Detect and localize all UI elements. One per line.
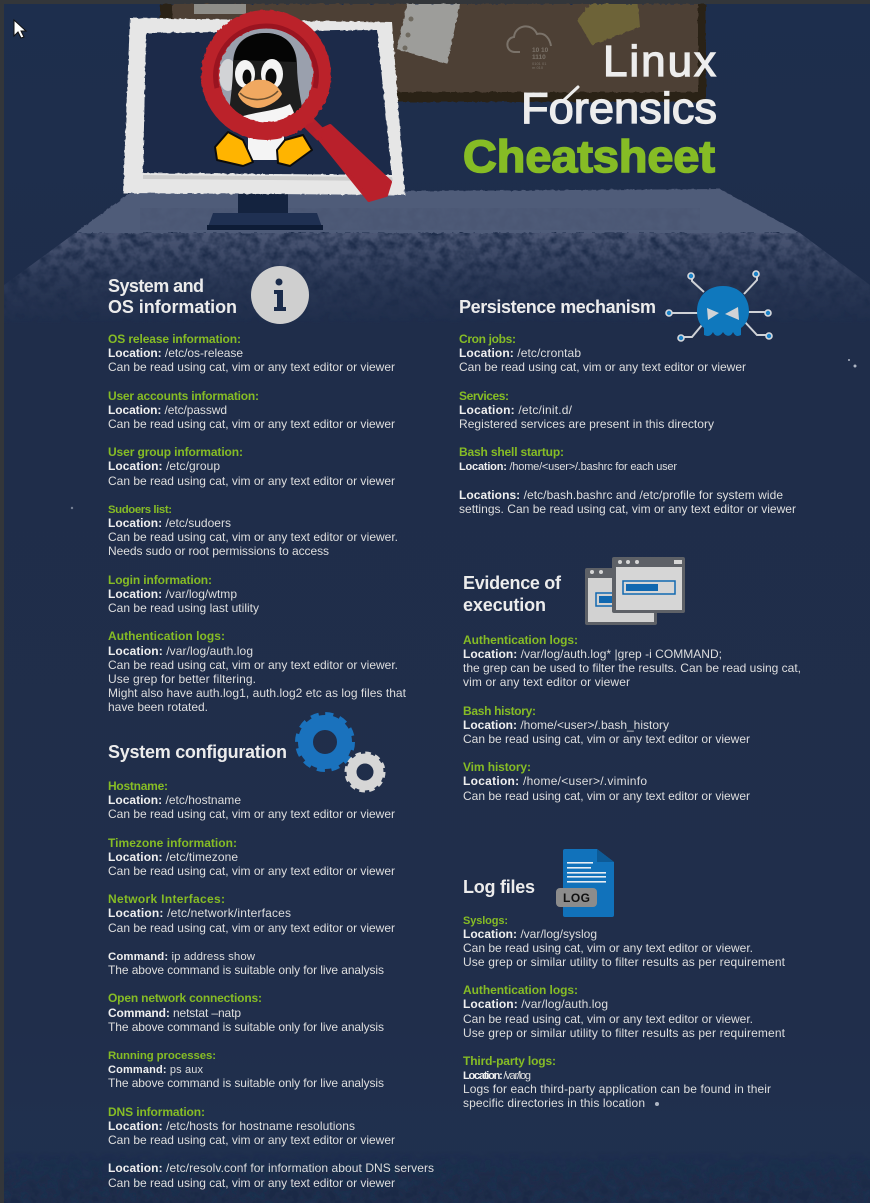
heading: system and OS information: OS information [108, 297, 237, 317]
title: Linux [603, 37, 716, 86]
cloud doodle: 0101 01 [532, 61, 547, 66]
entry: DNS information [108, 1105, 434, 1190]
entry: authentication logs: Use grep for better filtering. [108, 672, 256, 686]
entry: syslogs: Use grep or similar utility to filter results as per requirement [463, 955, 786, 969]
entry: sudoers: Can be read using cat, vim or any text editor or viewer. [108, 530, 398, 544]
entry: syslogs [463, 915, 786, 969]
panel: log files [463, 849, 786, 1110]
icon: info [251, 266, 309, 324]
entry: authentication logs [108, 629, 407, 714]
entry: hostname: Hostname: [108, 779, 168, 793]
entry: running processes: Running processes: [108, 1050, 216, 1062]
entry: network interfaces: Command: ip address show [108, 951, 256, 963]
entry: open network connections: Command: netstat –natp [108, 1006, 241, 1020]
cloud doodle: m 010 [532, 65, 544, 70]
entry: DNS information: Location: /etc/resolv.conf for information about DNS servers [108, 1161, 434, 1175]
title [463, 37, 717, 182]
entry: login: Can be read using last utility [108, 601, 259, 615]
panel: evidence of execution [463, 557, 801, 803]
magnifier handle [306, 120, 390, 200]
cloud doodle [507, 26, 551, 70]
entry: open network connections [108, 991, 384, 1034]
entry: third-party logs: Location: /var/log [463, 1070, 531, 1082]
paint specks [71, 359, 857, 1106]
entry: login [108, 573, 259, 615]
penguin eyes [235, 60, 255, 88]
entry: running processes: The above command is suitable only for live analysis [108, 1076, 384, 1090]
monitor stand [207, 190, 323, 230]
entry: network interfaces: Location: /etc/network/interfaces [108, 906, 291, 920]
pinned sticky note [577, 4, 640, 45]
entry: login: Location: /var/log/wtmp [108, 587, 237, 601]
entry: bash shell startup: settings. Can be read using cat, vim or any text editor or viewer [459, 502, 796, 516]
entry: cron jobs: Can be read using cat, vim or any text editor or viewer [459, 360, 746, 374]
entry: syslogs: Can be read using cat, vim or any text editor or viewer. [463, 941, 753, 955]
entry: authentication logs: Authentication logs: [463, 633, 578, 647]
entry: authentication logs: the grep can be used to filter the results. Can be read using cat, [463, 661, 801, 675]
icon: skull with circuit wires [666, 271, 772, 341]
entry: vim history: Location: /home/<user>/.viminfo [463, 774, 647, 788]
entry: DNS information: Can be read using cat, vim or any text editor or viewer [108, 1133, 395, 1147]
entry: running processes [108, 1050, 384, 1090]
entry: bash shell startup [459, 445, 796, 516]
heading: system configuration: System configuration [108, 742, 287, 762]
penguin feet [215, 130, 312, 166]
entry: user accounts: User accounts information: [108, 389, 259, 403]
bottom texture [4, 1150, 870, 1203]
entry: authentication logs: Location: /var/log/auth.log* |grep -i COMMAND; [463, 647, 722, 661]
entry: cron jobs [459, 332, 746, 374]
mouse cursor [14, 20, 26, 38]
magnifier ring [210, 19, 322, 131]
entry: authentication logs: Use grep or similar utility to filter results as per requirement [463, 1026, 786, 1040]
entry: third-party logs [463, 1054, 771, 1110]
icon: log document: LOG [563, 891, 590, 905]
monitor [123, 18, 405, 230]
entry: open network connections: The above command is suitable only for live analysis [108, 1020, 384, 1034]
entry: DNS information: DNS information: [108, 1105, 205, 1119]
heading: system and OS information: System and [108, 276, 204, 296]
entry: user accounts [108, 389, 395, 431]
entry: vim history: Vim history: [463, 760, 531, 774]
entry: syslogs: Location: /var/log/syslog [463, 927, 597, 941]
entry: authentication logs: Location: /var/log/auth.log [108, 644, 253, 658]
entry: hostname: Can be read using cat, vim or any text editor or viewer [108, 807, 395, 821]
entry: user accounts: Can be read using cat, vim or any text editor or viewer [108, 417, 395, 431]
entry: authentication logs: Can be read using cat, vim or any text editor or viewer. [463, 1012, 753, 1026]
entry: authentication logs: have been rotated. [108, 700, 208, 714]
entry: bash history [463, 704, 750, 746]
heading: persistence mechanism: Persistence mechanism [459, 297, 656, 317]
entry: sudoers: Needs sudo or root permissions to access [108, 544, 329, 558]
cloud doodle: 1110 [532, 54, 546, 61]
monitor screen [143, 30, 392, 175]
cloud doodle: 10 10 [532, 47, 549, 54]
entry: hostname: Location: /etc/hostname [108, 793, 241, 807]
entry: sudoers: Location: /etc/sudoers [108, 516, 231, 530]
entry: cron jobs: Cron jobs: [459, 332, 516, 346]
entry: timezone: Can be read using cat, vim or any text editor or viewer [108, 864, 395, 878]
entry: DNS information: Location: /etc/hosts for hostname resolutions [108, 1119, 355, 1133]
icon: log document [556, 849, 614, 917]
entry: user group: Can be read using cat, vim or any text editor or viewer [108, 474, 395, 488]
entry: bash shell startup: Locations: /etc/bash.bashrc and /etc/profile for system wide [459, 488, 783, 502]
entry: user accounts: Location: /etc/passwd [108, 403, 227, 417]
heading: evidence of execution: Evidence of [463, 573, 562, 593]
entry: running processes: Command: ps aux [108, 1064, 204, 1076]
logo: penguin under magnifying glass [210, 19, 390, 200]
entry: services: Location: /etc/init.d/ [459, 403, 573, 417]
title: Forensics [521, 84, 717, 133]
entry: user group [108, 445, 395, 488]
panel: system and OS information [108, 266, 407, 714]
entry: third-party logs: Logs for each third-party application can be found in their [463, 1082, 771, 1096]
entry: sudoers [108, 504, 398, 558]
entry: login: Login information: [108, 573, 212, 587]
panel: system configuration [108, 714, 434, 1190]
entry: hostname [108, 779, 395, 821]
entry: timezone [108, 836, 395, 878]
entry: OS release: Can be read using cat, vim or any text editor or viewer [108, 360, 395, 374]
entry: services: Services: [459, 389, 509, 403]
entry: authentication logs [463, 633, 801, 689]
entry: sudoers: Sudoers list: [108, 504, 172, 516]
entry: vim history: Can be read using cat, vim or any text editor or viewer [463, 789, 750, 803]
entry: services: Registered services are present in this directory [459, 417, 714, 431]
corkboard [160, 4, 706, 102]
entry: network interfaces: The above command is suitable only for live analysis [108, 963, 384, 977]
entry: authentication logs: vim or any text editor or viewer [463, 675, 630, 689]
entry: user group: Location: /etc/group [108, 459, 220, 473]
penguin beak [238, 80, 282, 108]
entry: syslogs: Syslogs: [463, 915, 508, 927]
heading: log files: Log files [463, 877, 535, 897]
entry: authentication logs: Can be read using cat, vim or any text editor or viewer. [108, 658, 398, 672]
icon: gears [298, 714, 384, 790]
penguin belly [243, 104, 294, 122]
lens contents [218, 28, 314, 122]
entry: open network connections: Open network connections: [108, 991, 262, 1005]
entry: vim history [463, 760, 750, 803]
entry: timezone: Timezone information: [108, 836, 237, 850]
entry: authentication logs: Location: /var/log/auth.log [463, 997, 608, 1011]
entry: bash history: Can be read using cat, vim or any text editor or viewer [463, 732, 750, 746]
entry: third-party logs: specific directories in this location [463, 1096, 645, 1110]
entry: bash history: Bash history: [463, 704, 536, 718]
heading: evidence of execution [463, 573, 562, 615]
entry: authentication logs: Authentication logs: [463, 983, 578, 997]
entry: OS release [108, 332, 395, 374]
entry: bash history: Location: /home/<user>/.bash_history [463, 718, 669, 732]
entry: OS release: OS release information: [108, 332, 241, 346]
entry: authentication logs: Authentication logs: [108, 629, 225, 643]
entry: third-party logs: Third-party logs: [463, 1054, 556, 1068]
entry: authentication logs [463, 983, 786, 1040]
desk [4, 189, 870, 335]
entry: DNS information: Can be read using cat, vim or any text editor or viewer [108, 1176, 395, 1190]
entry: timezone: Location: /etc/timezone [108, 850, 238, 864]
heading: evidence of execution: execution [463, 595, 546, 615]
entry: network interfaces [108, 892, 395, 977]
heading: system and OS information [108, 276, 237, 317]
entry: bash shell startup: Location: /home/<user>/.bashrc for each user [459, 461, 677, 473]
pinned note left [194, 4, 246, 14]
entry: cron jobs: Location: /etc/crontab [459, 346, 581, 360]
entry: authentication logs: Might also have auth.log1, auth.log2 etc as log files that [108, 686, 407, 700]
monitor bezel [123, 18, 405, 195]
entry: user group: User group information: [108, 445, 243, 459]
panel: persistence mechanism [459, 271, 796, 516]
entry: bash shell startup: Bash shell startup: [459, 445, 564, 459]
title: Cheatsheet [463, 131, 715, 182]
entry: services [459, 389, 714, 431]
icon: application windows [585, 557, 685, 625]
pinned paper note [397, 4, 460, 64]
entry: network interfaces: Can be read using cat, vim or any text editor or viewer [108, 921, 395, 935]
entry: network interfaces: Network Interfaces: [108, 892, 225, 906]
entry: OS release: Location: /etc/os-release [108, 346, 243, 360]
